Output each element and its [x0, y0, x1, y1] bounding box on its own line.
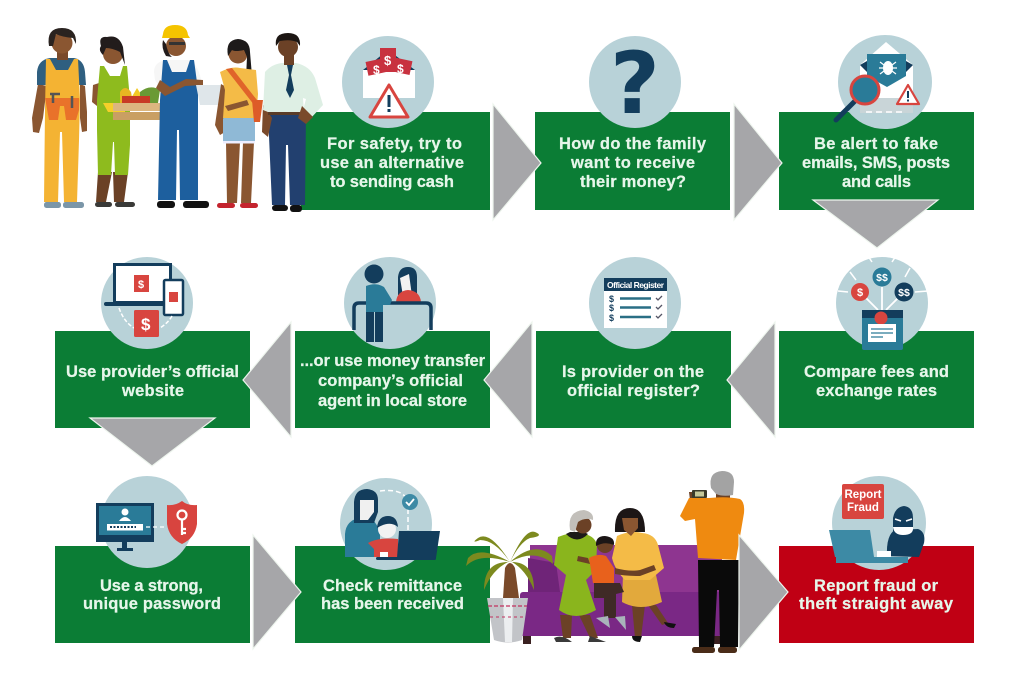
- icon: register list: $: [609, 294, 614, 304]
- icon: currency coins and device: [836, 256, 928, 350]
- icon: money envelope with warning: $: [384, 53, 392, 68]
- icon: monitor and shield key: [96, 476, 197, 568]
- person: man in shirt and tie: [262, 33, 323, 212]
- icon: currency coins and device: $: [857, 287, 863, 299]
- arrow: password to check: [253, 535, 301, 649]
- icon: laptop and phone: $: [141, 315, 151, 334]
- grandfather taking a photo: [680, 471, 744, 653]
- panel: strong password: [55, 476, 250, 643]
- text: theft straight away: [799, 595, 954, 613]
- illustration: family on sofa: [466, 471, 744, 653]
- icon: money envelope with warning: $: [397, 62, 404, 76]
- icon: money envelope with warning: [342, 36, 434, 128]
- text: How do the family: [559, 135, 707, 153]
- icon: envelope bug and magnifier: [836, 35, 932, 129]
- panel: report fraud: [779, 476, 974, 643]
- text: Use provider’s official: [66, 363, 239, 381]
- icon: register list: Official Register: [607, 280, 665, 290]
- arrow: compare to register: [727, 322, 775, 437]
- mother in yellow outfit: [612, 508, 676, 642]
- icon: question mark: [589, 34, 681, 134]
- text: website: [121, 382, 184, 400]
- icon: laptop and phone: [101, 257, 193, 349]
- text: Compare fees and: [804, 363, 949, 381]
- panel: fake emails: [779, 35, 974, 210]
- text: Check remittance: [323, 577, 462, 595]
- person: grocer in green dungarees with crate: [92, 36, 163, 207]
- panel: provider's website: [55, 257, 250, 428]
- person: builder with hard hat and tablet: [154, 25, 230, 208]
- text: Is provider on the: [562, 363, 704, 381]
- arrow: to report fraud: [739, 535, 788, 650]
- icon: register list: $: [609, 303, 614, 313]
- text: Be alert to fake: [814, 135, 938, 153]
- text: company’s official: [318, 372, 463, 390]
- panel: compare fees: [779, 256, 974, 428]
- panel: official register: [536, 257, 731, 428]
- text: has been received: [321, 595, 464, 613]
- panel background: [295, 546, 490, 643]
- person: tradesman in yellow overalls: [32, 28, 87, 208]
- icon: laptop and phone: $: [138, 279, 144, 291]
- grandmother in green dress: [554, 510, 606, 642]
- text: official register?: [567, 382, 700, 400]
- panel background: [779, 112, 974, 210]
- arrow: down to row two: [813, 200, 938, 248]
- arrow: register to agent: [484, 322, 532, 437]
- sofa: [520, 545, 722, 644]
- text: unique password: [83, 595, 221, 613]
- icon: report sign and masked thief: Report: [844, 489, 882, 501]
- icon: parent, child and laptop: [340, 478, 440, 570]
- panel background: [55, 331, 250, 428]
- illustration: five workers: [32, 25, 323, 212]
- icon: report sign and masked thief: Fraud: [847, 502, 879, 514]
- icon: customer at counter: [344, 257, 436, 349]
- person: woman in yellow top with bag: [215, 39, 263, 208]
- icon: register list: [589, 257, 681, 349]
- panel background: [55, 546, 250, 643]
- panel background: [295, 331, 490, 428]
- arrow: agent to website: [243, 322, 291, 437]
- panel background: [535, 112, 730, 210]
- panel background: [301, 112, 490, 210]
- arrow: step 1 to 2: [493, 104, 541, 220]
- icon: currency coins and device: $$: [876, 272, 888, 284]
- text: to sending cash: [330, 173, 454, 191]
- panel background: [779, 331, 974, 428]
- icon: register list: $: [609, 313, 614, 323]
- child in orange shirt: [577, 536, 626, 630]
- icon: question mark: ?: [610, 34, 660, 134]
- text: For safety, try to: [327, 135, 462, 153]
- text: their money?: [580, 173, 686, 191]
- panel background: [536, 331, 731, 428]
- panel: how to receive: [535, 34, 730, 210]
- text: and calls: [842, 173, 911, 191]
- plant in silver pot: [466, 532, 553, 642]
- panel: local agent: [295, 257, 490, 428]
- icon: money envelope with warning: $: [373, 63, 380, 77]
- text: Report fraud or: [814, 577, 939, 595]
- arrow: step 2 to 3: [734, 104, 782, 220]
- text: Use a strong,: [100, 577, 203, 595]
- panel: check remittance: [295, 478, 490, 643]
- panel background: [779, 546, 974, 643]
- icon: currency coins and device: $$: [898, 287, 910, 299]
- text: exchange rates: [816, 382, 937, 400]
- text: emails, SMS, posts: [802, 154, 950, 172]
- text: ...or use money transfer: [300, 352, 486, 370]
- arrow: down to row three: [90, 418, 215, 466]
- panel: alternative to cash: [301, 36, 490, 210]
- icon: report sign and masked thief: [829, 476, 926, 570]
- text: want to receive: [570, 154, 695, 172]
- text: use an alternative: [320, 154, 464, 172]
- text: agent in local store: [318, 392, 467, 410]
